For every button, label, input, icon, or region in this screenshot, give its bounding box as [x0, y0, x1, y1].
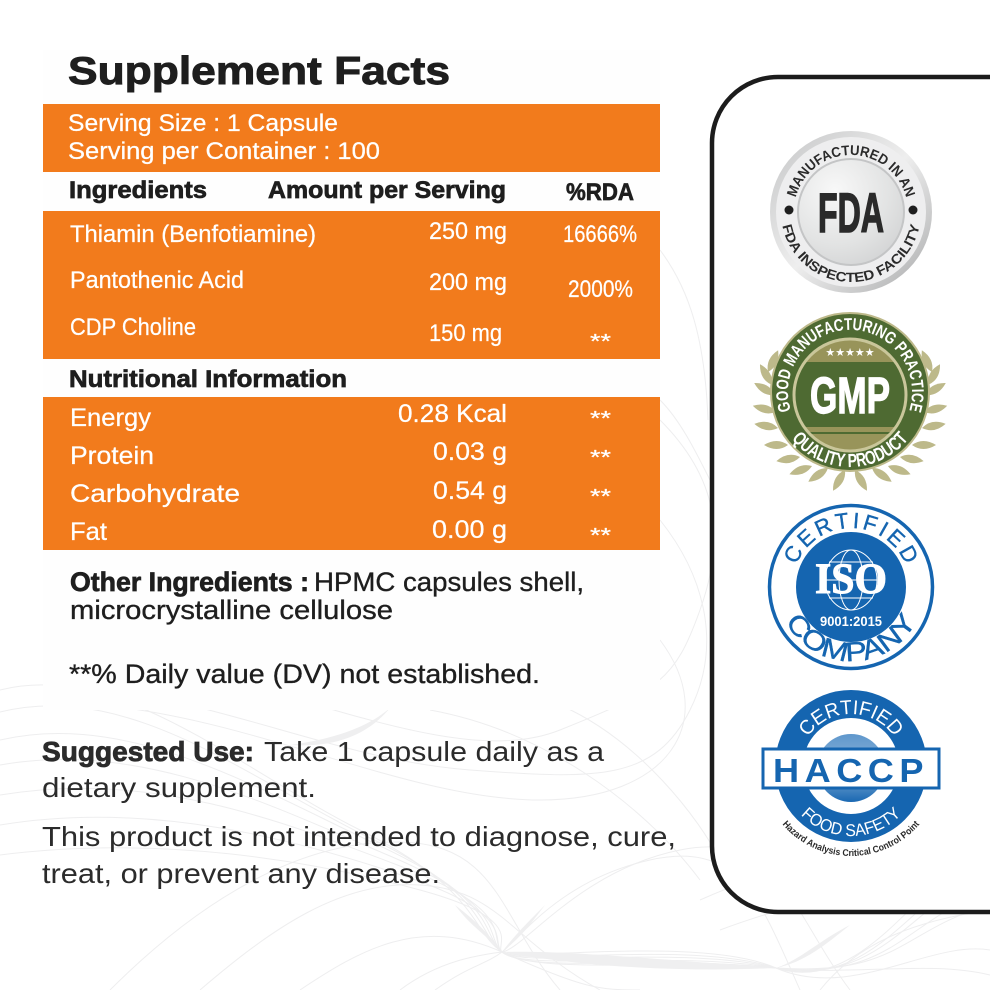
nutrition band: ** — [590, 486, 611, 508]
nutrition band: 0.54 g — [433, 477, 507, 505]
table header row: %RDA — [566, 179, 634, 206]
badge: GMP: ★★★★★ — [825, 347, 875, 359]
suggested use text: Take 1 capsule daily as a — [264, 736, 604, 767]
nutrition band — [43, 397, 660, 550]
nutrition band: 0.03 g — [433, 438, 507, 466]
other ingredients: microcrystalline cellulose — [70, 595, 393, 625]
serving band: Serving Size : 1 Capsule — [68, 110, 338, 137]
suggested use text: Suggested Use: — [42, 736, 254, 767]
nutrition band: Fat — [70, 518, 107, 546]
badge: HACCP — [762, 690, 940, 856]
ingredients band: 16666% — [563, 221, 637, 248]
ingredients band — [43, 211, 660, 359]
ingredients band: Pantothenic Acid — [70, 267, 244, 294]
badge: ISO: ISO — [815, 556, 887, 603]
badge: GMP — [752, 312, 948, 491]
nutrition band: Energy — [70, 404, 152, 432]
nutrition band: Protein — [70, 442, 154, 470]
nutrition band: 0.00 g — [432, 516, 507, 544]
serving band — [43, 104, 660, 172]
badge: HACCP: CERTIFIED — [800, 700, 902, 734]
disclaimer text — [42, 821, 676, 889]
nutrition band: ** — [590, 408, 611, 430]
badge: ISO: 9001:2015 — [820, 613, 882, 629]
badge: GMP: GMP — [810, 367, 890, 424]
heading: supplement facts: Supplement Facts — [68, 50, 450, 93]
badge: ISO: COMPANY — [789, 611, 912, 662]
badge: GMP: GOOD MANUFACTURING PRACTICE — [776, 318, 924, 413]
background wave pattern — [0, 250, 990, 990]
daily value note: **% Daily value (DV) not established. — [69, 659, 540, 689]
badge: ISO — [768, 504, 934, 670]
nutritional information heading: Nutritional Information — [69, 366, 347, 393]
other ingredients: Other Ingredients : — [70, 567, 309, 597]
badge: HACCP: FOOD SAFETY — [802, 806, 898, 836]
nutrition band: Carbohydrate — [70, 480, 240, 508]
ingredients band: 150 mg — [429, 320, 502, 347]
nutrition band: ** — [590, 447, 611, 469]
background wave accent — [290, 708, 850, 969]
badge: HACCP: HACCP — [773, 752, 929, 789]
ingredients band: 2000% — [568, 276, 633, 303]
suggested use text: dietary supplement. — [42, 772, 316, 803]
nutrition band: 0.28 Kcal — [398, 400, 507, 428]
ingredients band: Thiamin (Benfotiamine) — [70, 221, 316, 248]
badge: FDA — [770, 131, 932, 293]
ingredients band: ** — [590, 331, 611, 353]
panel: certifications — [710, 74, 990, 914]
disclaimer text: This product is not intended to diagnose, cure, — [42, 821, 676, 852]
serving band: Serving per Container : 100 — [68, 138, 380, 165]
badge: FDA: FDA INSPECTED FACILITY — [782, 224, 919, 282]
table header row — [69, 177, 634, 206]
nutrition band: ** — [590, 525, 611, 547]
other ingredients: HPMC capsules shell, — [314, 567, 584, 597]
badge: GMP: QUALITY PRODUCT — [793, 430, 906, 468]
other ingredients — [70, 567, 584, 625]
ingredients band: 250 mg — [429, 218, 507, 245]
table header row: Ingredients — [69, 177, 207, 204]
ingredients band: CDP Choline — [70, 314, 196, 341]
suggested use text — [42, 736, 604, 803]
ingredients band: 200 mg — [429, 269, 507, 296]
badge: FDA: FDA — [818, 181, 884, 244]
badge: FDA: MANUFACTURED IN AN — [786, 145, 916, 197]
panel: supplement facts — [43, 50, 660, 710]
disclaimer text: treat, or prevent any disease. — [42, 858, 440, 889]
badge: HACCP: Hazard Analysis Critical Control Point — [782, 820, 920, 856]
table header row: Amount per Serving — [268, 177, 506, 204]
badge: ISO: CERTIFIED — [785, 512, 916, 562]
laurel leaves — [752, 349, 948, 493]
